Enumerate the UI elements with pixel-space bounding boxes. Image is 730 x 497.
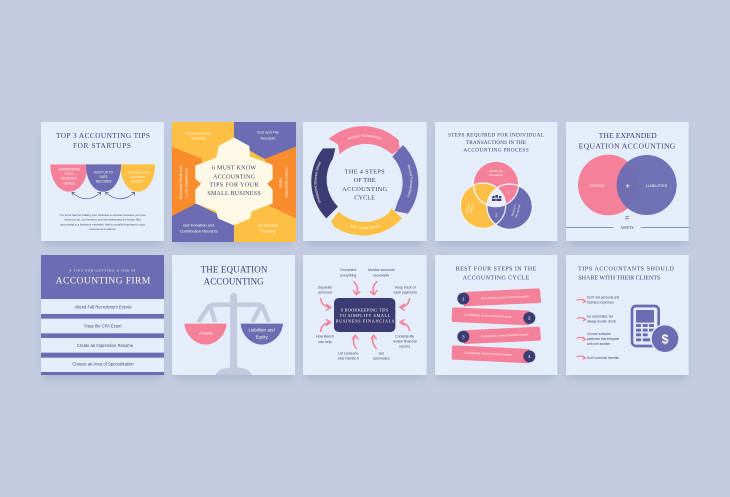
venn diagram: Identify the [489, 169, 503, 173]
panel: best four steps in the accounting cycle [435, 255, 557, 375]
ring labels [314, 134, 413, 229]
yellow arc step [331, 208, 402, 235]
tip list: Don't mix personal and [587, 296, 619, 300]
tip list: Choose software [587, 332, 611, 336]
icon: people in venn centre [492, 195, 501, 201]
curved arrows between tips [72, 192, 135, 199]
tip list: Go automated, but [587, 314, 613, 318]
panel: the equation accounting [172, 255, 295, 375]
tip labels: How Bench [316, 335, 334, 339]
tip list: always double check [587, 319, 617, 323]
segment labels: Records [192, 137, 206, 141]
segment labels: Loss Statements [184, 168, 188, 197]
purple segment bottom left [172, 204, 234, 242]
venn diagram: 1 [508, 190, 511, 195]
cream centre flower [196, 138, 272, 225]
title [448, 132, 544, 154]
title: THE EQUATION [201, 265, 268, 275]
panel: top 3 accounting tips for startups [41, 122, 164, 241]
title: TOP 3 ACCOUNTING TIPS [56, 131, 150, 140]
ring labels: Unadjusted Balance Sheet [314, 162, 321, 204]
venn diagram [460, 161, 532, 229]
body text: You work hard at making your business a success because you love [59, 213, 146, 217]
title: FOR STARTUPS [73, 141, 131, 150]
title [578, 267, 675, 281]
title: ACCOUNTING PROCESS [463, 148, 529, 154]
tip labels: automated [373, 357, 390, 361]
step 2 [452, 307, 535, 325]
assets bowl: Assets [199, 330, 212, 335]
centre title: ACCOUNTING [213, 174, 256, 180]
navy arc step [311, 148, 338, 218]
segment labels: Do Accurate [258, 223, 278, 227]
venn: liabilities circle: LIABILITIES [646, 184, 668, 188]
purple arc step [392, 145, 418, 214]
panel: 6 must know accounting tips [172, 122, 296, 242]
tip row 1: Attend Fall Recruitment Events [74, 304, 132, 309]
liabilities bowl [241, 324, 283, 345]
title [579, 131, 676, 150]
assets line: ASSETS [620, 226, 634, 230]
tip 2: purple semicircle [86, 164, 121, 192]
tip list: with one another [587, 342, 610, 346]
centre title: ACCOUNTING [342, 186, 388, 193]
tip 2: purple semicircle: RECORDS [96, 180, 112, 184]
title: STEPS REQUIRED FOR INDIVIDUAL [448, 132, 544, 138]
tip labels: receivable [373, 273, 389, 277]
panel: the 4 steps of the accounting cycle [303, 122, 427, 241]
header text: 4 TIPS FOR GETTING A JOB AT [70, 268, 137, 272]
segment labels: Save Accurate [186, 131, 211, 135]
panel: 4 tips for getting a job at accounting firm [41, 255, 164, 375]
centre title: TIPS FOR YOUR [210, 183, 258, 189]
title: TRANSACTIONS IN THE [466, 140, 526, 146]
segment labels: Taxes [279, 178, 283, 188]
step 2: 2 [528, 316, 531, 321]
venn diagram: 2 [495, 213, 498, 218]
centre title: THE 4 STEPS [345, 168, 385, 175]
tip labels: Consistently [395, 335, 414, 339]
segment labels: Contribution Receipts [180, 228, 218, 233]
venn diagram: transaction [489, 173, 503, 177]
tip labels: review financial [393, 340, 417, 344]
step 1: Consistently review financial reports [481, 294, 529, 300]
panel: 8 bookkeeping tips [303, 255, 427, 375]
body text: success as a startup. [89, 227, 116, 231]
step 3: 3 [462, 334, 465, 339]
tip list: Don't overlook benefits [587, 356, 619, 360]
tip labels [316, 268, 417, 361]
tip 3: yellow semicircle: MAINTAIN [131, 175, 145, 179]
step 3: Consistently review financial reports [481, 332, 529, 338]
segment labels: Sort and File [257, 131, 279, 135]
step 4: 4 [528, 354, 531, 359]
header text [56, 268, 151, 287]
tip list: platforms that integrate [587, 337, 620, 341]
centre box: 8 BOOKKEEPING TIPS [341, 307, 389, 312]
centre title: OF THE [354, 177, 376, 184]
tip labels: everything [340, 273, 356, 277]
segment labels: Schedule Profit and [179, 166, 183, 199]
title: ACCOUNTING CYCLE [463, 275, 530, 281]
tip 3: yellow semicircle: ORGANIZE AND [126, 170, 150, 174]
tip labels: cash payments [394, 291, 417, 295]
panel: the expanded equation accounting [566, 122, 689, 241]
tip labels: Monitor accounts [368, 268, 395, 272]
ring labels: Add Journal Entries [350, 224, 380, 229]
centre box: TO SIMPLIFY SMALL [340, 313, 391, 318]
icon: calculator with dollar coin: $ [661, 332, 669, 346]
liabilities bowl: Equity [256, 335, 269, 340]
equals sign: = [625, 213, 629, 222]
centre box [334, 298, 395, 332]
centre title: CYCLE [354, 195, 375, 202]
tip labels: reports [399, 345, 410, 349]
orange segment right [265, 147, 296, 219]
step 4 [452, 345, 535, 363]
body text: what you do, not because you love balancing the books. But [65, 218, 141, 222]
tip 2: purple semicircle: KEEP UP TO [94, 170, 114, 174]
title: SHARE WITH THEIR CLIENTS [578, 275, 660, 281]
ring labels: Analyze Transactions [348, 134, 382, 140]
tip 3: yellow semicircle: BUDGET [131, 180, 144, 184]
title: EQUATION ACCOUNTING [579, 141, 676, 150]
tip labels: personal [318, 291, 332, 295]
tip labels: Document [340, 268, 356, 272]
centre title: SMALL BUSINESS [207, 191, 261, 197]
body text [59, 213, 146, 231]
tip labels: Get [379, 352, 384, 356]
title [201, 265, 268, 287]
curved pink arrows [321, 281, 410, 349]
venn diagram: Record in [510, 204, 517, 217]
venn diagram: effects [469, 204, 475, 214]
step 2: Consistently review financial reports [464, 313, 512, 319]
tip labels: Let someone [338, 352, 358, 356]
tip 1: pink semicircle: YOUR [64, 172, 74, 176]
panel: steps required for individual transactions [435, 122, 557, 241]
tip 1: pink semicircle [50, 164, 88, 192]
tip labels: Separate [318, 285, 332, 289]
tip row 2: Pass the CPA Exam [84, 324, 122, 329]
venn diagram: Analyze [464, 203, 471, 214]
pink arc step [329, 126, 400, 154]
centre title [207, 166, 261, 197]
tip row 4: Choose an Area of Specialization [72, 362, 134, 367]
venn diagram: 1 [475, 186, 478, 191]
tip labels: else handle it [338, 357, 359, 361]
orange segment left [172, 147, 202, 219]
segment labels: Receipts [261, 137, 276, 141]
centre box: BUSINESS FINANCIALS [336, 319, 395, 324]
step 3 [457, 327, 541, 344]
step 1 [457, 288, 541, 306]
centre title [342, 168, 388, 202]
segment labels: Collect Applicable [284, 168, 288, 198]
venn diagram: the journal [514, 204, 521, 218]
tip list: business expenses [587, 301, 614, 305]
title [56, 131, 150, 150]
tip 2: purple semicircle: DATE [100, 175, 108, 179]
segment labels: Get Donation and [183, 223, 214, 228]
header text: ACCOUNTING FIRM [56, 276, 151, 287]
panel: tips accountants should share [566, 255, 689, 375]
title: ACCOUNTING [204, 277, 264, 287]
title: THE EXPANDED [599, 131, 657, 140]
step 1: 1 [462, 296, 465, 301]
purple segment top right [234, 122, 296, 159]
venn: liabilities circle: + [625, 181, 630, 191]
tip labels: Keep track of [395, 285, 416, 289]
title: BEST FOUR STEPS IN THE [456, 266, 537, 272]
ring labels: Record Transactions [408, 164, 413, 197]
tip labels: can help [318, 340, 332, 344]
centre title: 6 MUST KNOW [212, 166, 256, 172]
tip 1: pink semicircle: FINANCIAL [61, 177, 77, 181]
tip 1: pink semicircle: UNDERSTAND [58, 167, 81, 171]
title [456, 266, 537, 281]
tip 3: yellow semicircle [120, 164, 155, 192]
scale illustration [198, 296, 269, 375]
tip list [577, 296, 620, 360]
body text: accounting is a business essential, that's crucially important to your [60, 222, 145, 226]
venn: capital circle: CAPITAL [589, 184, 605, 188]
tip 1: pink semicircle: GOALS [64, 181, 74, 185]
liabilities bowl: Liabilities and [249, 328, 275, 333]
venn: liabilities circle [617, 155, 677, 215]
segment labels [179, 131, 288, 233]
tip row 3: Create an Impressive Resume [77, 343, 134, 348]
segment labels: Invoicing [260, 229, 276, 233]
step 4: Consistently review financial reports [464, 351, 512, 357]
title: TIPS ACCOUNTANTS SHOULD [578, 267, 675, 273]
